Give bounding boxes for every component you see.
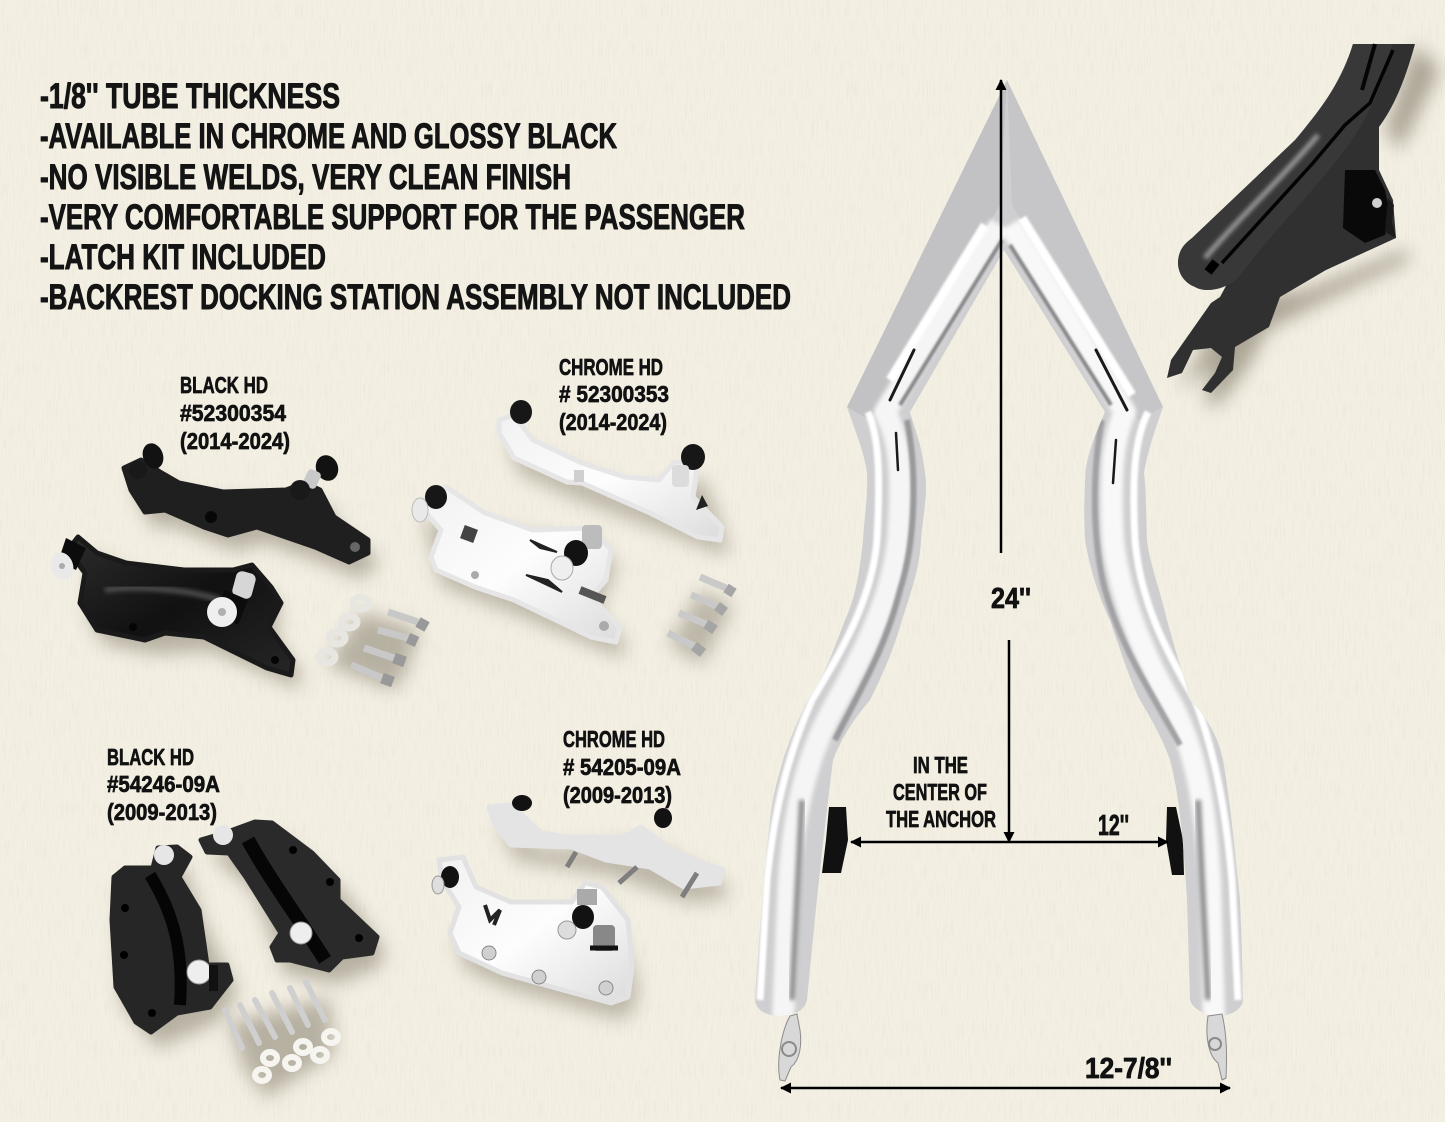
arrow: 12 inch anchor width	[851, 841, 1168, 843]
anchor note: CENTER OF	[893, 779, 987, 805]
anchor note: IN THE	[913, 752, 968, 778]
chrome sissy bar frame	[740, 70, 1260, 1081]
arrow: 12-7/8 inch base width	[781, 1087, 1230, 1089]
top chrome bracket	[499, 415, 722, 540]
bracket set: chrome 2014-2024	[412, 400, 734, 665]
chrome bracket studs and details	[412, 400, 708, 631]
bottom mounting tabs	[779, 1014, 1227, 1081]
top bracket studs	[129, 440, 360, 552]
bracket and fork	[1167, 44, 1415, 393]
label: black HD 52300354	[180, 372, 290, 454]
chrome set hardware: bolts	[668, 577, 734, 653]
lower chrome bracket	[432, 857, 632, 1003]
bracket set: chrome 2009-2013	[432, 795, 729, 1019]
label: chrome HD 52300353	[559, 354, 669, 435]
feature list heading: -LATCH KIT INCLUDED	[40, 238, 326, 277]
feature list heading: -BACKREST DOCKING STATION ASSEMBLY NOT INCLUDED	[40, 278, 791, 317]
feature list heading: -VERY COMFORTABLE SUPPORT FOR THE PASSENGER	[40, 198, 745, 237]
right black plate	[201, 822, 377, 970]
label: black HD 54246-09A: BLACK HD	[107, 744, 194, 770]
feature list heading: -NO VISIBLE WELDS, VERY CLEAN FINISH	[40, 158, 571, 197]
label: black HD 54246-09A	[107, 744, 220, 825]
feature list heading: -1/8'' TUBE THICKNESS	[40, 77, 340, 116]
bracket set: black 2009-2013	[112, 822, 385, 1098]
anchor note: THE ANCHOR	[886, 806, 996, 832]
bracket set: black 2014-2024	[47, 440, 427, 690]
hardware: long bolts and washers	[225, 982, 338, 1081]
label: chrome HD 52300353: CHROME HD	[559, 354, 663, 380]
label: chrome HD 54205-09A: CHROME HD	[563, 726, 665, 752]
dimension: 12 inches: 12''	[1098, 810, 1129, 842]
label: black HD 52300354: #52300354	[180, 400, 286, 426]
bottom chrome bracket	[417, 487, 620, 642]
label: black HD 52300354: (2014-2024)	[180, 428, 290, 454]
dimension: 24 inches: 24''	[991, 583, 1031, 615]
dimension: 12-7/8 inches: 12-7/8''	[1085, 1053, 1172, 1085]
anchor note	[886, 752, 996, 832]
feature list heading	[40, 77, 791, 317]
label: chrome HD 52300353: # 52300353	[559, 381, 669, 407]
label: black HD 54246-09A: #54246-09A	[107, 771, 220, 797]
feature list heading: -AVAILABLE IN CHROME AND GLOSSY BLACK	[40, 117, 617, 156]
hardware: washers and bolts	[319, 597, 427, 682]
tube	[1178, 44, 1392, 290]
black sissy bar detail photo	[1167, 44, 1440, 408]
latch	[1343, 170, 1396, 243]
upper chrome bracket	[489, 795, 723, 897]
arrow: 24 inch height	[1001, 80, 1009, 842]
label: chrome HD 52300353: (2014-2024)	[559, 409, 667, 435]
bottom bracket studs	[47, 538, 279, 664]
top black bracket	[124, 460, 368, 562]
bottom black bracket	[68, 537, 293, 675]
bar silhouette and reflections	[740, 70, 1260, 1030]
left black plate	[112, 845, 231, 1032]
label: chrome HD 54205-09A: (2009-2013)	[563, 782, 672, 808]
label: black HD 52300354: BLACK HD	[180, 372, 268, 398]
label: black HD 54246-09A: (2009-2013)	[107, 799, 217, 825]
label: chrome HD 54205-09A: # 54205-09A	[563, 754, 681, 780]
label: chrome HD 54205-09A	[563, 726, 681, 808]
